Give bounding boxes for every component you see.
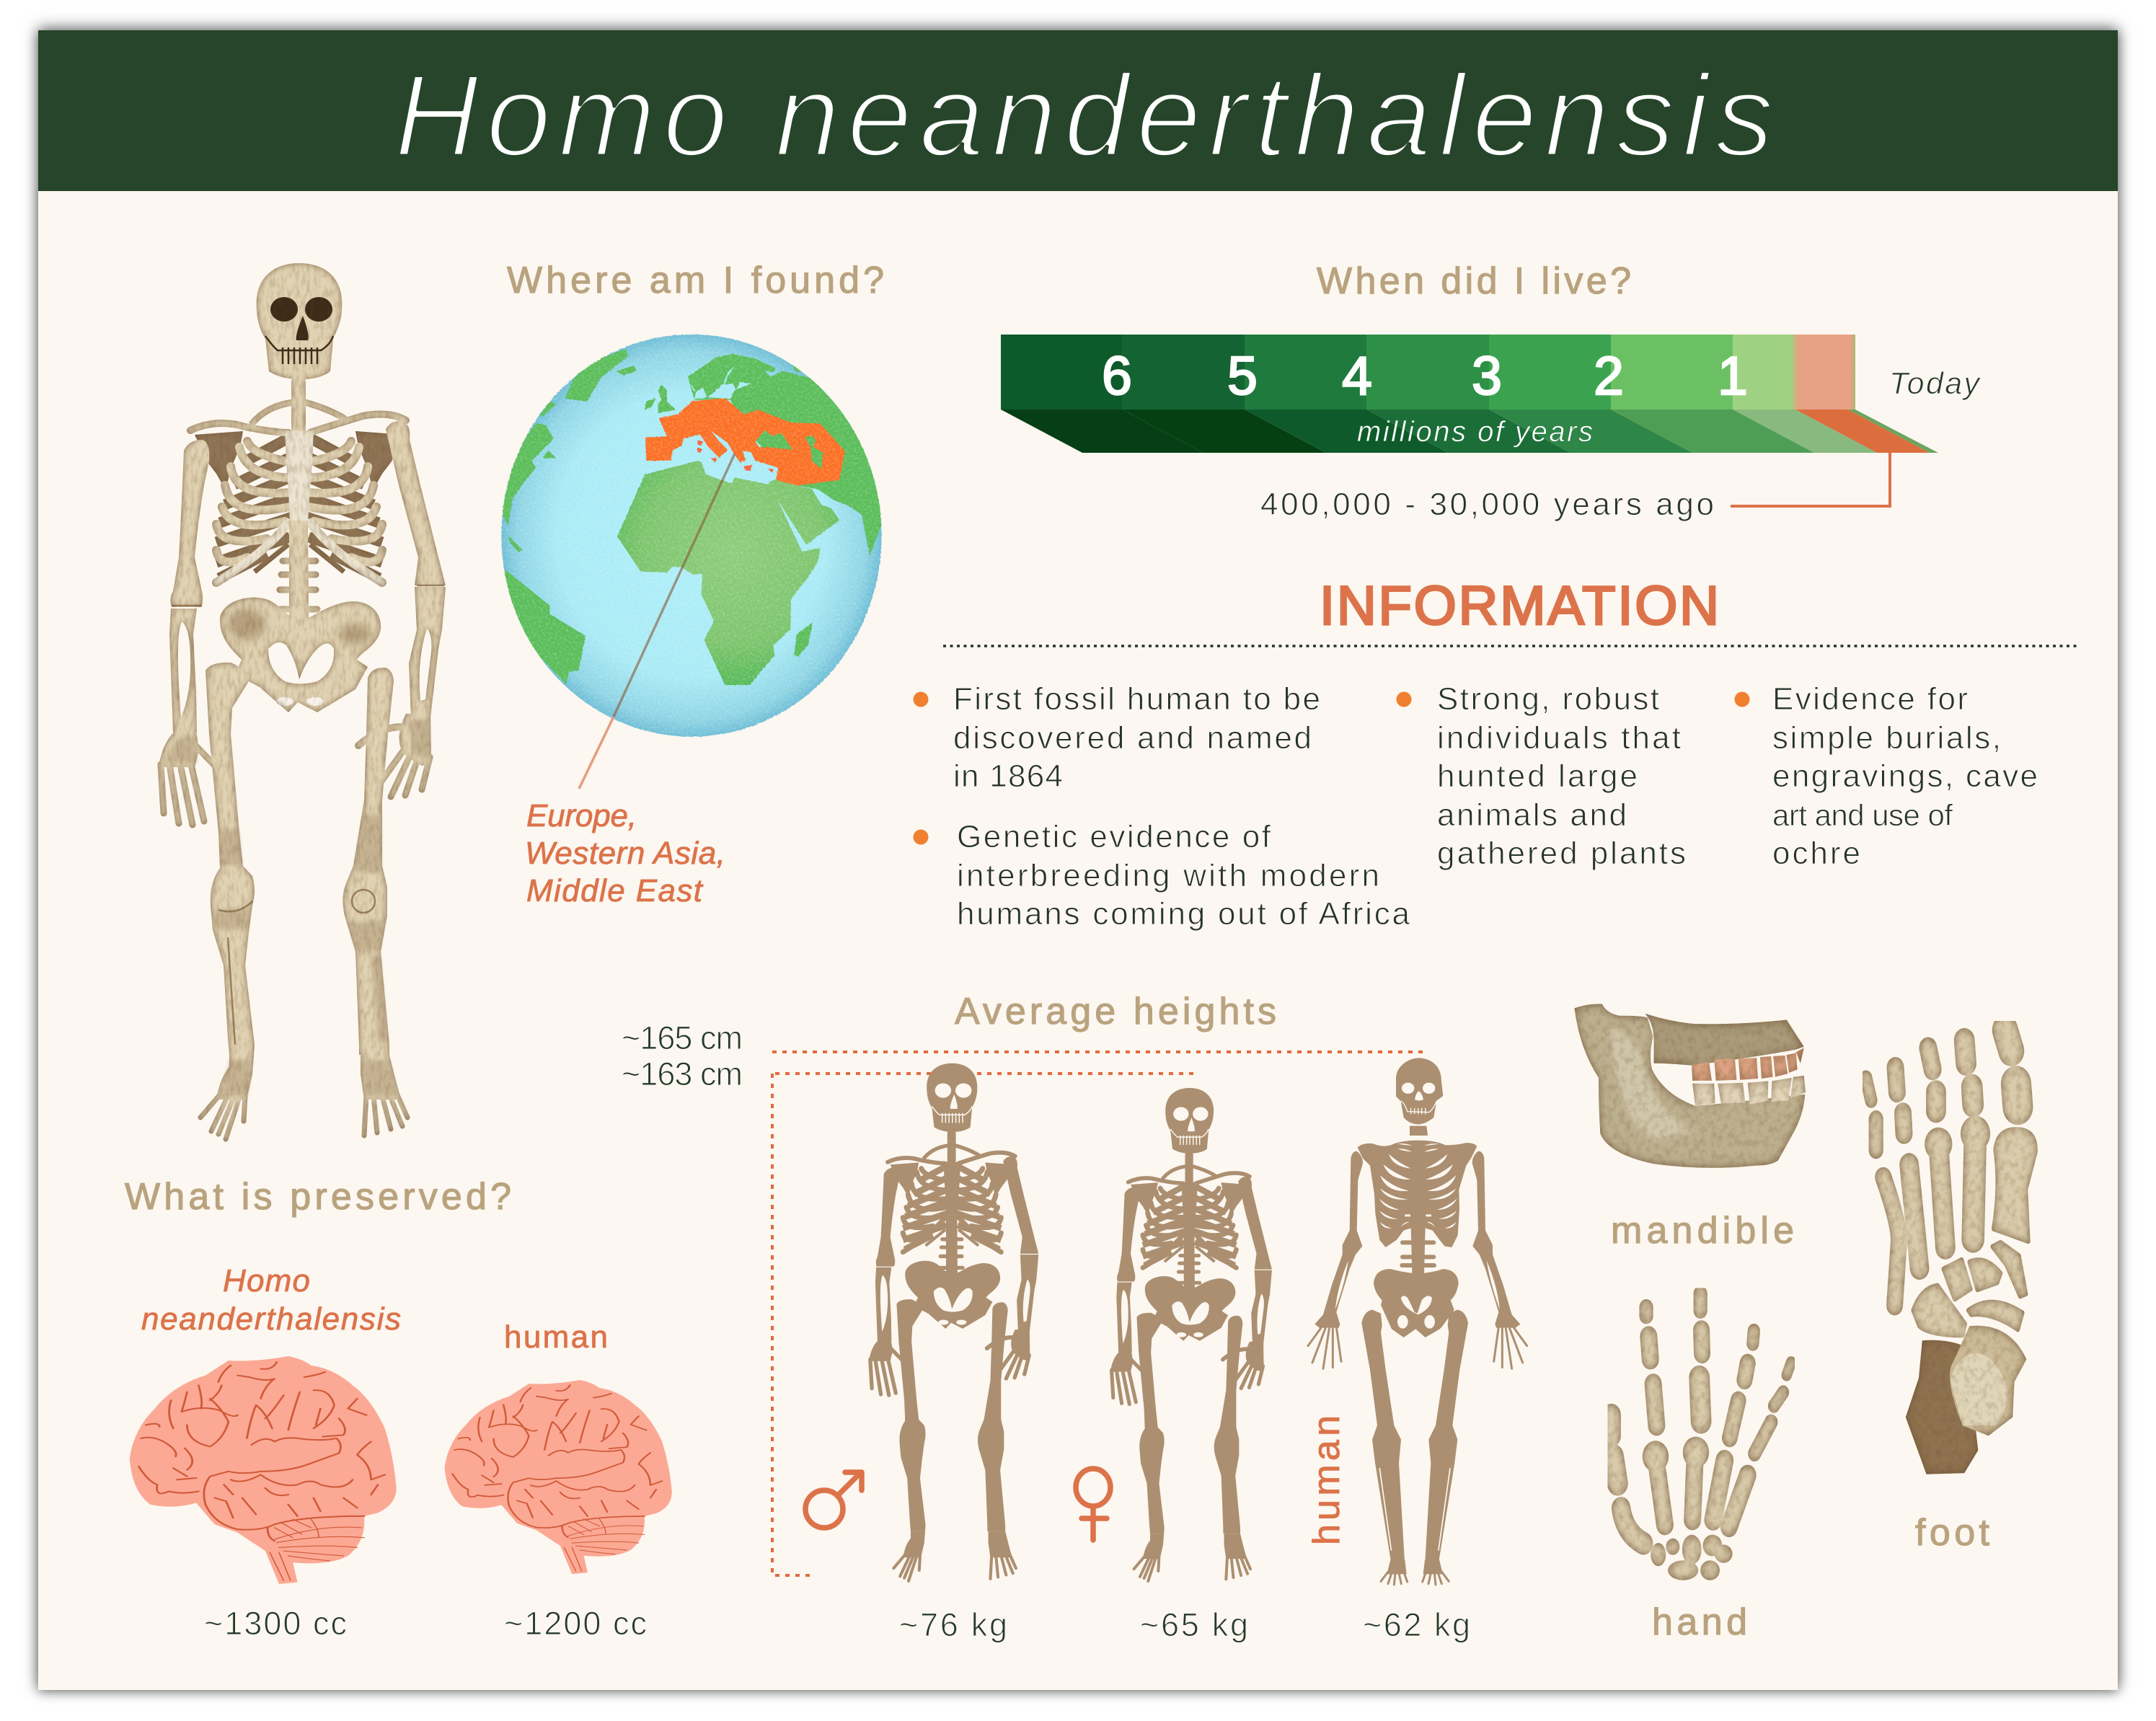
range highlight: Europe, Western Asia, Middle East [645,398,845,485]
pointer line from map to region label [579,454,735,789]
silhouette skeleton: male [869,1063,1038,1581]
brain label: neanderthal: neanderthalensis [141,1301,401,1337]
brain label: neanderthal: Homo [223,1263,310,1299]
timeline numbers: 5 [1227,345,1258,406]
weight: male: ~76 kg [899,1606,1007,1643]
header banner [38,30,2118,191]
brain volume: human: ~1200 cc [504,1605,647,1642]
bullet: genetic evidence: humans coming out of Africa [957,896,1410,932]
hand bones illustration [1612,1294,1791,1580]
height guide lines [772,1052,1427,1575]
bullet: strong individuals: Strong, robust [1437,681,1659,717]
bullet: strong individuals: hunted large [1437,758,1638,794]
height label 165 cm: ~165 cm [622,1019,743,1056]
bullet: first fossil [913,681,1320,794]
land: americas and eurasia [498,349,885,684]
date range label: 400,000 - 30,000 years ago [1260,487,1714,522]
heading: what is preserved: What is preserved? [125,1176,511,1218]
timeline bar [1001,335,1938,453]
bullet: strong individuals: individuals that [1437,720,1681,756]
timeline numbers: 2 [1594,345,1624,406]
region label: Europe, [526,798,637,833]
timeline numbers: 6 [1102,345,1132,406]
weight: human: ~62 kg [1363,1606,1470,1643]
weight: female: ~65 kg [1140,1606,1248,1643]
brain label: human: human [504,1319,608,1355]
bullet: burials and art: simple burials, [1772,720,2001,756]
mandible illustration [1574,1004,1806,1168]
height label 163 cm: ~163 cm [622,1056,743,1092]
information heading: INFORMATION [1320,575,1719,637]
bullet: burials and art: art and use of [1772,798,1953,832]
title: Homo neanderthalensis [394,50,1774,181]
rotated human label: human [1306,1415,1348,1545]
bullet: genetic evidence: interbreeding with modern [957,858,1379,893]
region label: Western Asia, [525,836,725,871]
bullet: strong individuals: gathered plants [1437,836,1686,871]
timeline axis label: millions of years [1357,416,1593,448]
timeline numbers: 4 [1342,345,1372,406]
timeline lower slanted face [1001,410,1938,453]
foot label: foot [1915,1512,1990,1554]
heading: where am I found: Where am I found? [507,260,884,301]
globe map [498,335,885,737]
heading: average heights: Average heights [955,991,1276,1032]
inland seas [684,366,751,399]
bullet: first fossil: First fossil human to be [953,681,1320,717]
skeleton shading overlays [164,609,429,1096]
bullet: burials and art: Evidence for [1772,681,1968,717]
bullet: genetic evidence [913,819,1410,932]
brain label: neanderthal [141,1263,401,1337]
icon: male symbol [805,1472,862,1528]
silhouette skeleton: human [1308,1058,1527,1585]
today label: Today [1889,366,1982,401]
bullet: strong individuals [1396,681,1686,871]
bullet: burials and art: ochre [1772,836,1860,871]
silhouette skeleton: female [1110,1088,1272,1581]
bullet: burials and art: engravings, cave [1772,758,2038,794]
timeline numbers: 1 [1718,345,1748,406]
timeline numbers: 3 [1472,345,1502,406]
brain volume: neanderthal: ~1300 cc [204,1605,347,1642]
date range connector [1731,453,1890,506]
region label [525,798,725,908]
bullet: first fossil: discovered and named [953,720,1312,756]
human brain [445,1380,672,1574]
neanderthal brain [130,1356,397,1584]
region label: Middle East [526,873,704,908]
hand label: hand [1652,1601,1747,1643]
large textured skeleton illustration [159,263,446,1139]
mandible label: mandible [1611,1210,1794,1252]
bullet: genetic evidence: Genetic evidence of [957,819,1271,854]
bullet: first fossil: in 1864 [953,758,1063,794]
bullet: burials and art [1735,681,2038,871]
foot bones illustration [1866,1030,2036,1474]
icon: female symbol [1076,1469,1110,1540]
timeline front segments [1001,335,1855,410]
heading: when did I live: When did I live? [1317,260,1631,302]
land: africa and arabia [617,461,839,685]
bullet: strong individuals: animals and [1437,797,1627,833]
timeline numbers [1102,345,1748,406]
